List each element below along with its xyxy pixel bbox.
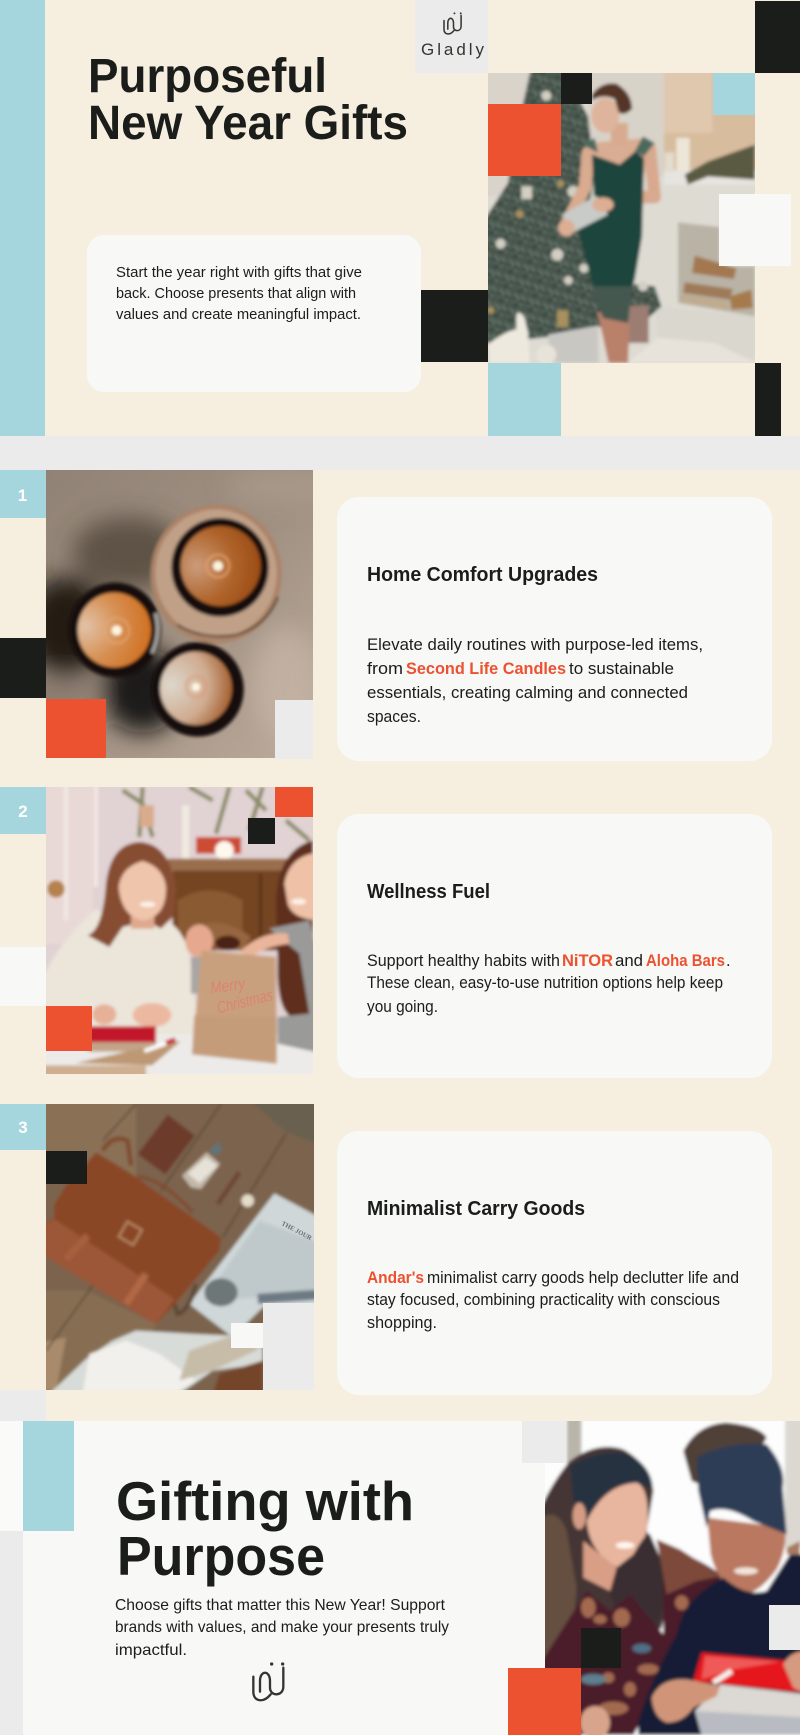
- woman 1 sweater: [36, 909, 196, 1035]
- card body: Second Life Candles: [406, 660, 566, 678]
- red ornament: [196, 837, 241, 854]
- number badge 3: 3: [18, 1118, 28, 1137]
- hero section: [0, 0, 800, 436]
- intro text: values and create meaningful impact.: [116, 306, 361, 323]
- head wrap: [697, 1444, 787, 1534]
- woman 1 neck and face: [131, 910, 154, 929]
- bottle: [182, 1152, 220, 1189]
- soft shadows on paper: [19, 470, 333, 740]
- cabinet: [168, 859, 294, 870]
- footer accent squares: [508, 1421, 800, 1735]
- woman 2 hair and body: [276, 840, 313, 1020]
- magazine title: THE JOUR: [280, 1220, 313, 1242]
- intro text: [116, 264, 362, 323]
- red gift: [693, 1653, 800, 1693]
- card body: [367, 952, 731, 1016]
- card: home comfort upgrades: [337, 497, 772, 761]
- card heading: Minimalist Carry Goods: [367, 1197, 585, 1220]
- number badge 1: [0, 470, 46, 518]
- handle: [103, 1139, 131, 1166]
- photo: two women opening a gift: [545, 1421, 800, 1735]
- bag body: [36, 1152, 221, 1325]
- card: wellness fuel: [337, 814, 772, 1078]
- dress: [579, 151, 644, 290]
- card body: and: [615, 952, 643, 970]
- white box: [695, 1684, 800, 1735]
- card body: from: [367, 660, 403, 678]
- hands: [92, 1004, 116, 1024]
- niche: [678, 222, 755, 316]
- candle jar left: [69, 583, 161, 677]
- card body: Aloha Bars: [646, 952, 725, 970]
- handwriting on bag: Christmas: [215, 985, 275, 1018]
- card body: to sustainable: [569, 660, 674, 678]
- footer title: [116, 1470, 414, 1587]
- card heading: Wellness Fuel: [367, 880, 490, 903]
- card body: shopping.: [367, 1314, 437, 1332]
- number badge 1: 1: [18, 486, 27, 505]
- grey divider band: [0, 436, 800, 470]
- section 1: home comfort: [0, 460, 772, 770]
- footer background: [0, 1421, 800, 1735]
- legs: [597, 311, 630, 363]
- logs: [692, 256, 736, 279]
- candle jar bottom: [152, 642, 244, 737]
- handwriting on bag: Merry: [209, 974, 248, 998]
- photo: two women wrapping gifts: [46, 787, 313, 1074]
- intro text: Start the year right with gifts that give: [116, 264, 362, 281]
- watch and clip: [241, 1194, 254, 1207]
- footer section: [0, 1411, 800, 1735]
- magazine: [189, 1193, 323, 1337]
- tree: [478, 66, 661, 343]
- card body: you going.: [367, 998, 438, 1016]
- card body: spaces.: [367, 708, 421, 726]
- cloth: [49, 1331, 263, 1394]
- footer body text: Choose gifts that matter this New Year! Support: [115, 1597, 446, 1614]
- brand logo tile: [415, 0, 488, 73]
- hero intro card: [87, 235, 421, 392]
- hero accent squares: [421, 1, 800, 436]
- section 2 accent squares: [0, 787, 313, 1051]
- card body: Andar's: [367, 1269, 424, 1287]
- sweater: [638, 1554, 800, 1735]
- left woman hair front: [610, 1534, 666, 1641]
- chest and arms: [588, 138, 646, 173]
- hero title: New Year Gifts: [88, 97, 408, 150]
- icon: Gladly mark: [444, 12, 462, 34]
- shirt: [537, 1548, 723, 1735]
- buckles: [119, 1222, 142, 1245]
- wood panel: [664, 66, 764, 170]
- woman 1 hair: [88, 842, 176, 947]
- section 3 accent squares: [0, 1151, 314, 1421]
- icon: footer Gladly mark: [253, 1662, 284, 1700]
- section 3: minimalist carry goods: [0, 1094, 772, 1421]
- card body: NiTOR: [562, 952, 613, 970]
- footer title: Gifting with: [116, 1470, 414, 1532]
- silver gift: [562, 196, 608, 232]
- greenery: [123, 787, 309, 840]
- hero photo: woman in green dress by christmas tree: [488, 73, 755, 363]
- card body: [367, 636, 703, 726]
- intro text: back. Choose presents that align with: [116, 285, 356, 302]
- candle jar back: [171, 518, 269, 617]
- card body: minimalist carry goods help declutter life and: [427, 1269, 739, 1287]
- paper bag: [192, 950, 277, 1064]
- number badge 3: [0, 1104, 46, 1150]
- card body: .: [726, 952, 731, 970]
- hands: [652, 1679, 720, 1723]
- section 2: wellness fuel: [0, 777, 772, 1088]
- card: minimalist carry goods: [337, 1131, 772, 1395]
- card body: These clean, easy-to-use nutrition options help keep: [367, 974, 723, 992]
- photo: leather bag flat lay: [46, 1104, 314, 1390]
- hero title: Purposeful: [88, 50, 327, 103]
- card body: [367, 1269, 739, 1332]
- card body: essentials, creating calming and connected: [367, 684, 688, 702]
- left woman face: [587, 1483, 648, 1568]
- brand name: Gladly: [421, 40, 484, 59]
- right woman face: [707, 1518, 785, 1595]
- right woman hair tuft: [683, 1423, 767, 1484]
- handwriting on bag: [209, 974, 275, 1018]
- card body: Elevate daily routines with purpose-led items,: [367, 636, 703, 654]
- hero title: [88, 50, 408, 150]
- footer body text: brands with values, and make your presents truly: [115, 1619, 449, 1636]
- pen: [713, 1671, 732, 1683]
- table: [36, 1034, 326, 1088]
- hero left blue bar: [0, 0, 45, 436]
- footer body text: [115, 1597, 449, 1659]
- card body: stay focused, combining practicality with conscious: [367, 1291, 720, 1309]
- gift boxes under tree: [628, 306, 649, 343]
- number badge 2: [0, 787, 46, 834]
- footer title: Purpose: [117, 1525, 325, 1587]
- number badge 2: 2: [18, 802, 28, 821]
- notebook: [138, 1115, 195, 1175]
- section 1 accent squares: [0, 638, 313, 759]
- red box: [88, 1026, 156, 1042]
- photo: three lit candles: [46, 470, 313, 758]
- footer left strips: [0, 1421, 74, 1735]
- bag strap: [174, 1284, 196, 1314]
- chair: [206, 923, 251, 950]
- garland: [685, 145, 755, 185]
- white deer: [490, 313, 530, 363]
- footer body text: impactful.: [115, 1642, 187, 1659]
- candles: [676, 138, 690, 171]
- candle: [182, 805, 189, 859]
- head: [591, 98, 619, 133]
- card body: Support healthy habits with: [367, 952, 560, 970]
- card heading: Home Comfort Upgrades: [367, 563, 598, 586]
- left woman hair: [537, 1447, 666, 1735]
- wood slice: [150, 505, 282, 643]
